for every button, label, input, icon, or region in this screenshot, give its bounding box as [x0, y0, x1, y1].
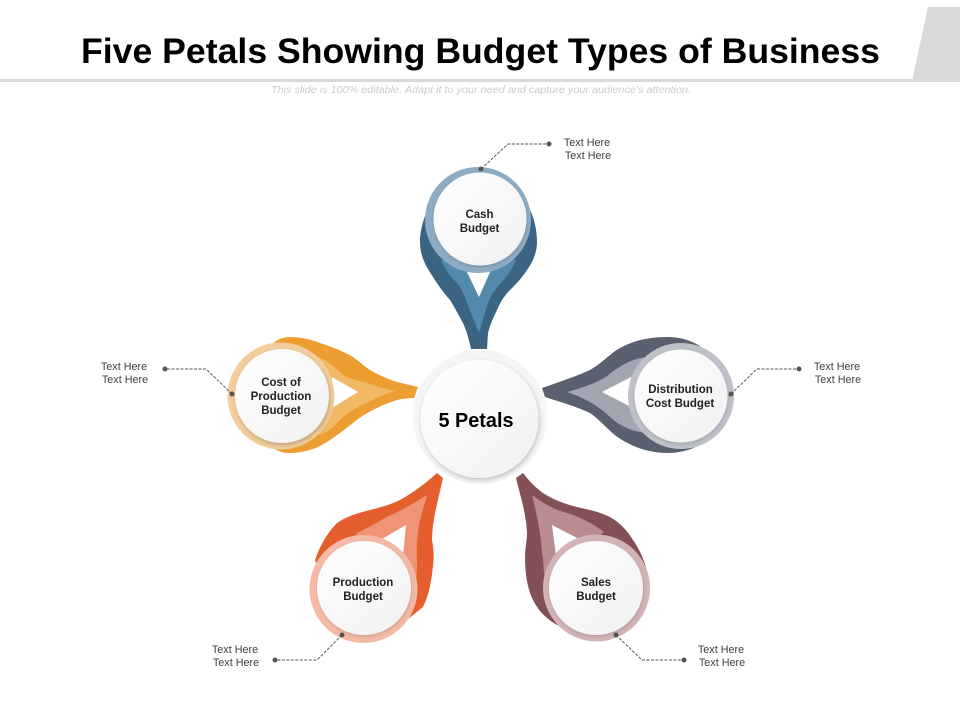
callout: sales budget: Text Here [699, 657, 745, 669]
callout: cost of production budget: Text Here [102, 374, 148, 386]
callout: cash budget: Text Here [565, 150, 611, 162]
callout: production budget: Text Here [212, 644, 258, 656]
callout: distribution cost budget: Text Here [814, 361, 860, 373]
subtitle: This slide is 100% editable. Adapt it to your need and capture your audience's attention. [271, 84, 691, 96]
petal: sales budget [516, 473, 650, 642]
petal: cost of production budget [228, 337, 418, 453]
petal: distribution cost budget [542, 337, 734, 453]
petal: cost of production budget: Cost of [261, 377, 301, 389]
header bar [0, 7, 960, 82]
petal: sales budget: Budget [576, 591, 616, 603]
center circle [413, 350, 547, 484]
title: Five Petals Showing Budget Types of Business [81, 32, 880, 71]
callout: sales budget: Text Here [698, 644, 744, 656]
petal: sales budget: Sales [581, 577, 611, 589]
petal: production budget: Budget [343, 591, 383, 603]
petal: production budget [310, 473, 443, 643]
callout: sales budget [614, 632, 745, 669]
callout: cash budget: Text Here [564, 137, 610, 149]
center circle: 5 Petals [438, 410, 514, 432]
callout: cash budget [478, 137, 611, 172]
petal: cash budget: Cash [465, 209, 494, 221]
petal: distribution cost budget: Cost Budget [646, 398, 714, 410]
callout: distribution cost budget [728, 361, 861, 396]
petal: distribution cost budget: Distribution [648, 384, 713, 396]
petal: production budget: Production [333, 577, 393, 589]
callout: distribution cost budget: Text Here [815, 374, 861, 386]
callout: production budget: Text Here [213, 657, 259, 669]
callout: production budget [212, 632, 344, 669]
callout: cost of production budget: Text Here [101, 361, 147, 373]
petal: cash budget: Budget [460, 223, 499, 235]
petal: cost of production budget: Production [251, 391, 311, 403]
petal: cost of production budget: Budget [261, 405, 301, 417]
callout: cost of production budget [101, 361, 234, 396]
petal: cash budget [420, 167, 537, 349]
